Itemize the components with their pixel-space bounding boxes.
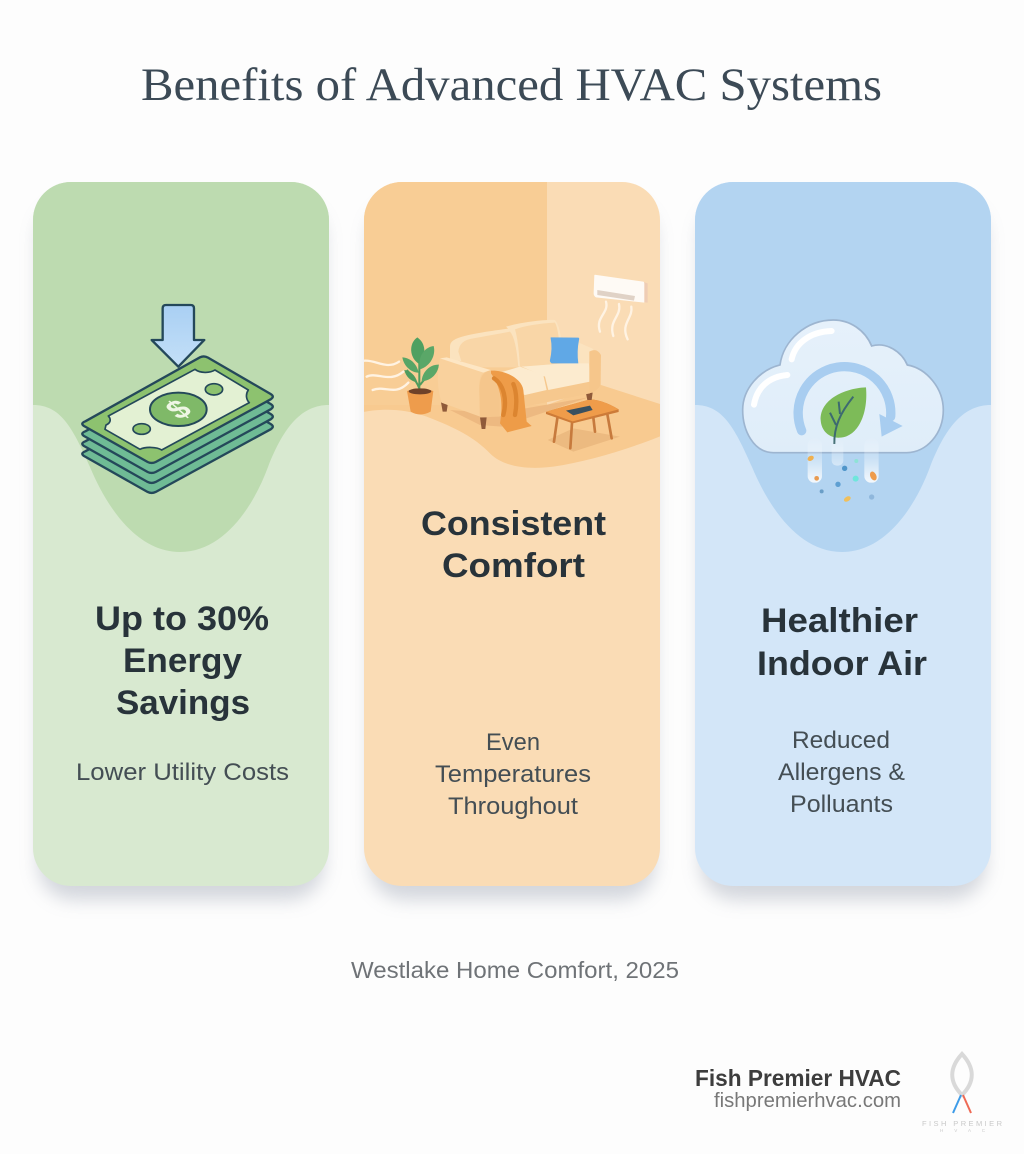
- text: reduced allergens: Allergens &: [778, 759, 905, 786]
- heading: energy savings: Energy: [123, 642, 242, 680]
- plant: [402, 337, 439, 414]
- heading: energy savings: [95, 600, 269, 722]
- text: reduced allergens: [778, 727, 905, 818]
- heading: consistent comfort: Comfort: [442, 547, 585, 585]
- text: lower utility costs: Lower Utility Costs: [76, 759, 289, 786]
- icon: stack of money with down arrow: [82, 305, 273, 493]
- brand name and url: fishpremierhvac.com: [714, 1090, 901, 1112]
- heading: healthier indoor air: [757, 602, 927, 683]
- brand name and url: Fish Premier HVAC: [695, 1065, 901, 1091]
- text: reduced allergens: Polluants: [790, 791, 893, 818]
- source note: Westlake Home Comfort, 2025: [351, 957, 679, 983]
- heading: consistent comfort: Consistent: [421, 505, 606, 543]
- logo: Fish Premier HVAC: FISH PREMIER: [922, 1119, 1003, 1128]
- panel: healthier indoor air: [695, 182, 991, 900]
- particles: [807, 455, 815, 462]
- icon: cloud with leaf and particles: [743, 320, 943, 503]
- logo: Fish Premier HVAC: [922, 1054, 1003, 1133]
- leaf: [821, 387, 866, 438]
- panel: energy savings: [33, 182, 329, 900]
- filtered air columns: [808, 438, 822, 483]
- title: Benefits of Advanced HVAC Systems: [141, 59, 882, 111]
- heading: energy savings: Up to 30%: [95, 600, 269, 638]
- sofa: [438, 320, 601, 432]
- cushion: [550, 337, 579, 363]
- heading: energy savings: Savings: [116, 684, 250, 722]
- blanket: [491, 371, 532, 432]
- text: even temperatures: [435, 729, 591, 820]
- air flow lines: [365, 361, 408, 390]
- text: reduced allergens: Reduced: [792, 727, 890, 754]
- heading: healthier indoor air: Healthier: [761, 602, 918, 640]
- room illustration: [360, 275, 663, 493]
- brand name and url: [695, 1065, 901, 1112]
- recycle arrow: [798, 367, 891, 431]
- panel: consistent comfort: [360, 182, 663, 900]
- text: even temperatures: Even: [486, 729, 540, 756]
- cloud: [743, 320, 943, 453]
- text: even temperatures: Throughout: [448, 793, 578, 820]
- heading: consistent comfort: [421, 505, 606, 585]
- heading: healthier indoor air: Indoor Air: [757, 645, 927, 683]
- text: even temperatures: Temperatures: [435, 761, 591, 788]
- logo: Fish Premier HVAC: H V A C: [940, 1128, 986, 1133]
- air conditioner: [594, 275, 648, 339]
- coffee table: [546, 399, 620, 452]
- icon: stack of money with down arrow: $: [158, 394, 199, 425]
- floor wave: [360, 410, 663, 493]
